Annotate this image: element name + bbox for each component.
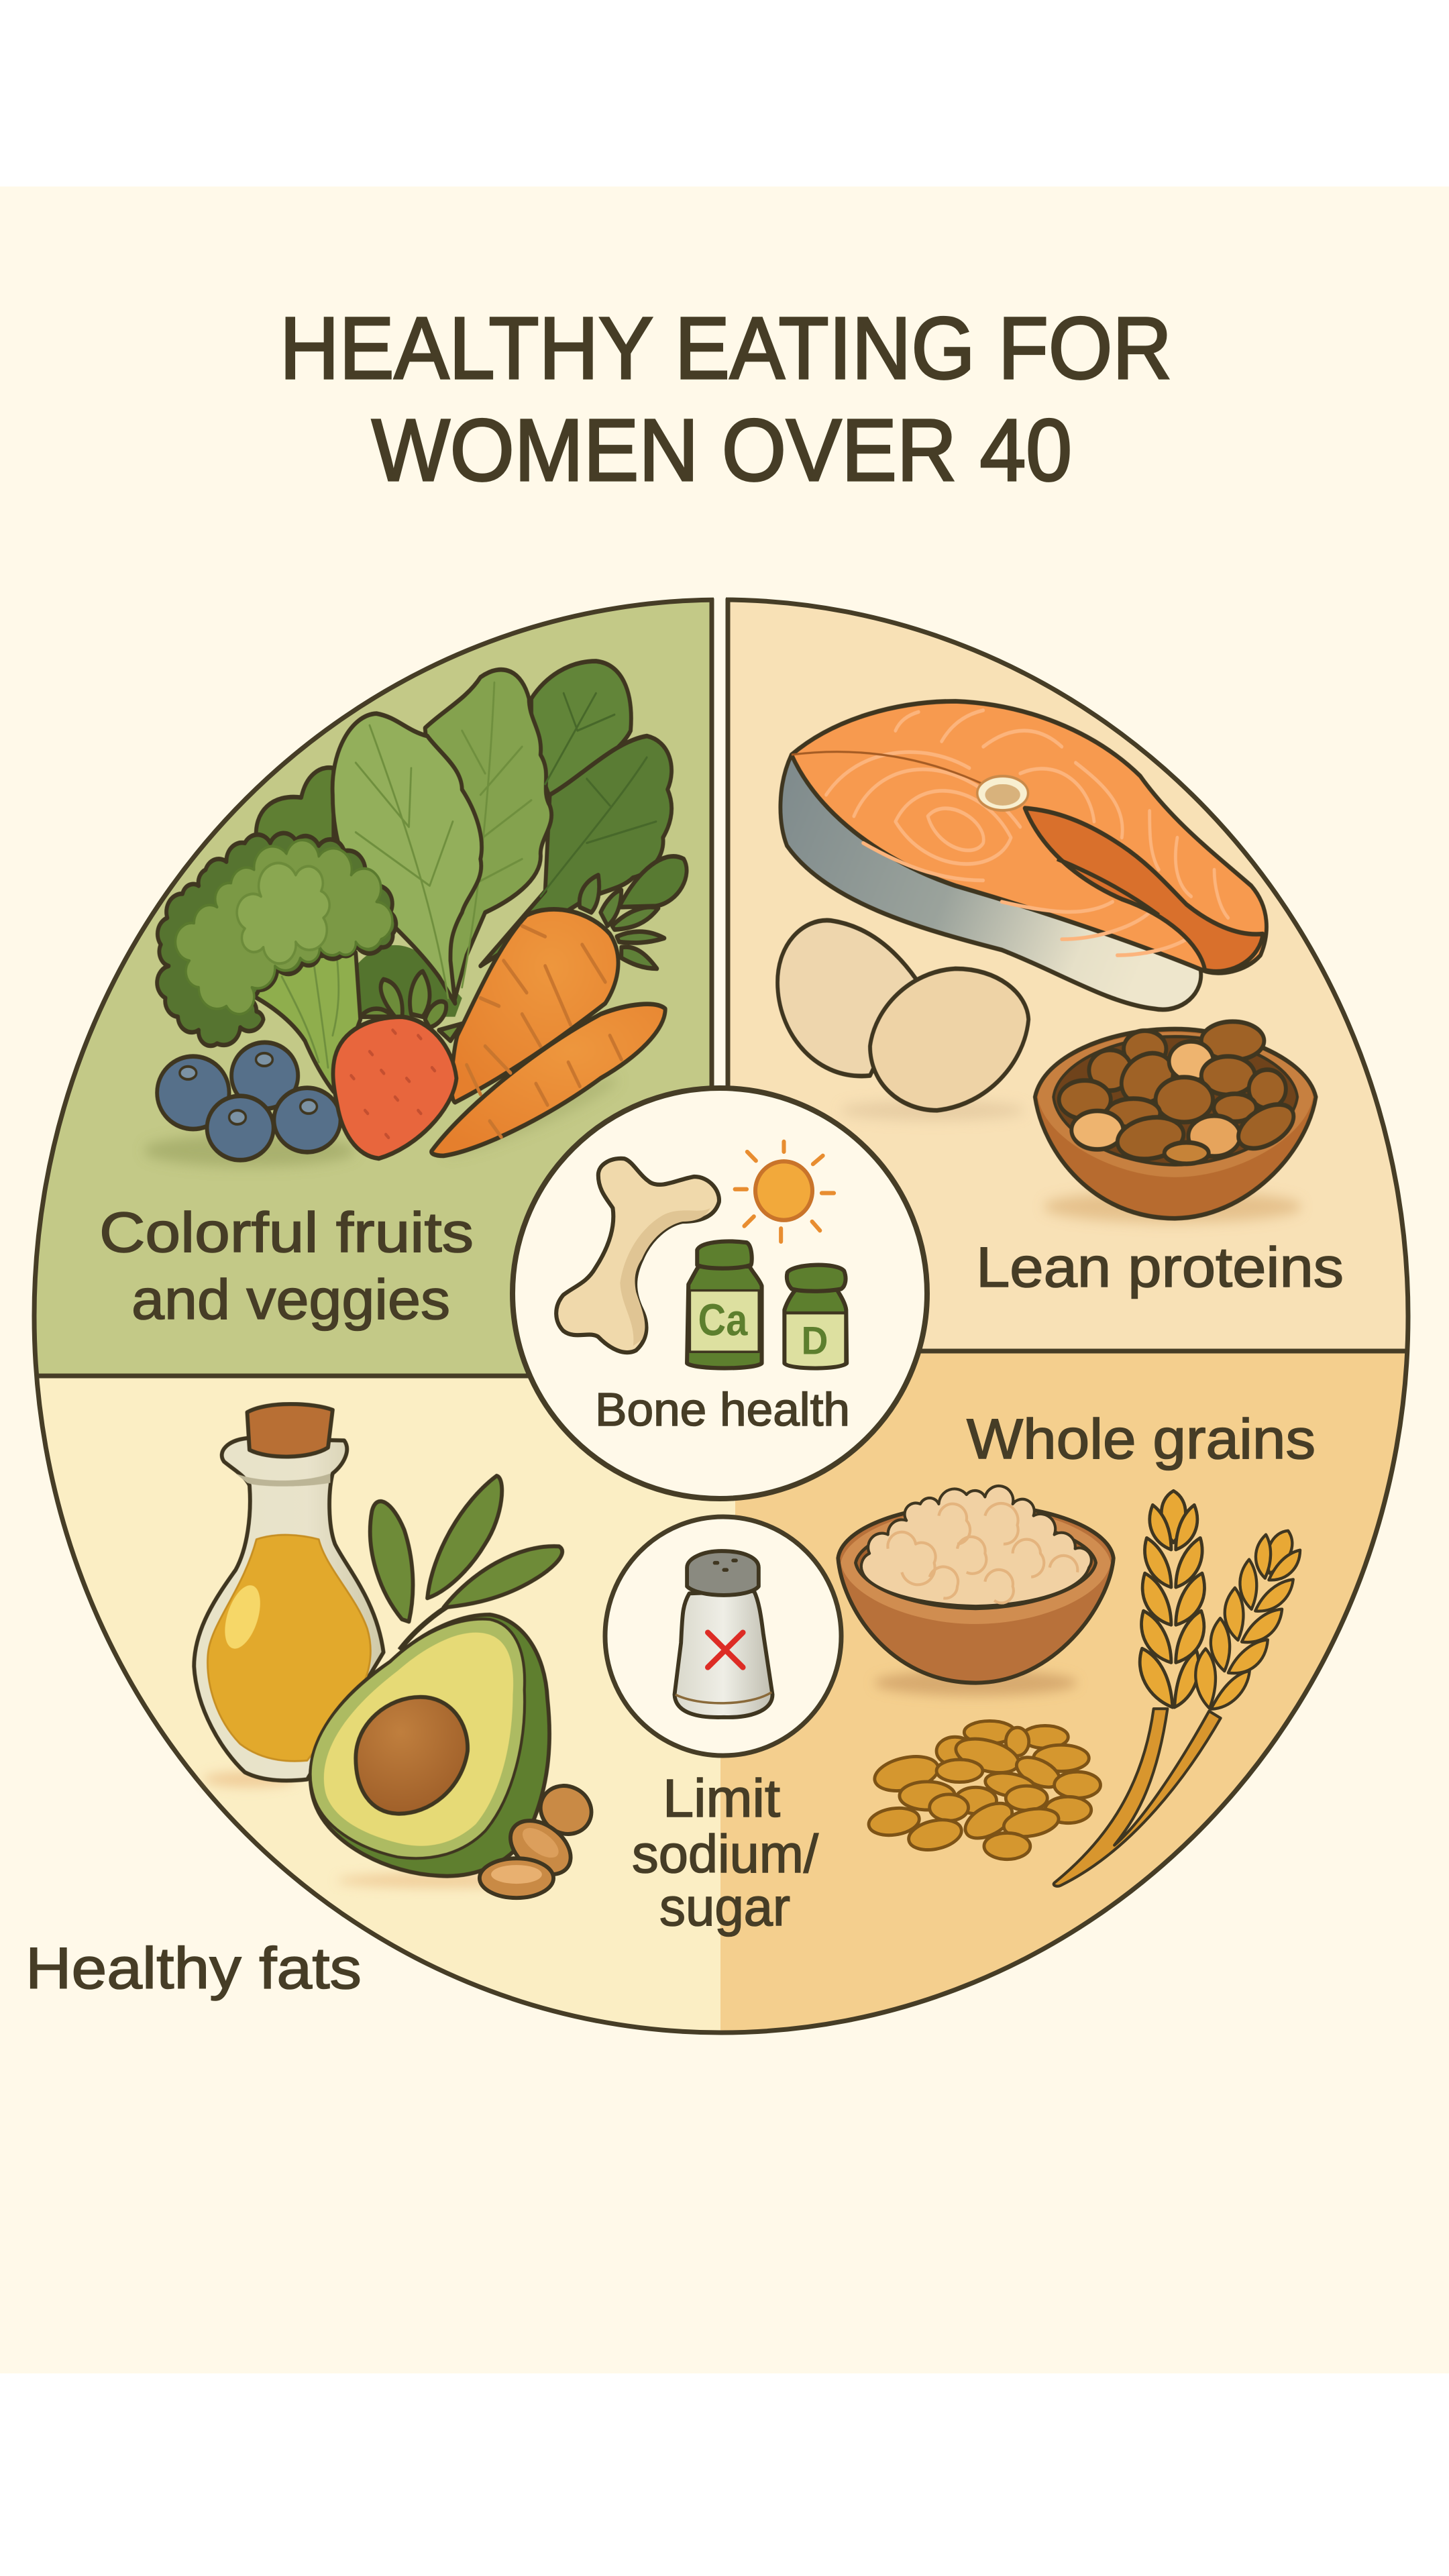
front leaf [333,714,482,1004]
label: limit sodium/sugar: sugar [659,1877,790,1937]
veins on front leaf [356,725,453,998]
icon: vitamin D jar [784,1265,847,1368]
illustration: healthy fats [194,1404,599,1898]
illustration: lean proteins [777,701,1316,1223]
label: lean proteins: Lean proteins [976,1236,1344,1299]
salmon spine [977,776,1028,810]
salmon slit [1057,859,1159,915]
shadow under produce [143,1067,622,1167]
label: limit sodium/sugar [632,1768,819,1937]
egg left [777,920,916,1076]
soft shadows [840,1101,1302,1223]
bowl shadow [874,1670,1077,1696]
salmon grain lines [826,710,1228,955]
label: colorful fruits and veggies: and veggies [131,1268,450,1331]
pile of grains [867,1721,1100,1860]
icon: calcium jar: Ca [698,1295,748,1345]
plate circle with four food sections [27,590,1419,2042]
leaves [370,1476,562,1650]
salmon skin [780,755,1201,1010]
strawberry seeds [351,1030,435,1138]
spine line [792,752,983,784]
illustration: whole grains [838,1486,1313,1886]
icon: bone [556,1159,719,1352]
back leaves [256,661,687,1017]
wheat stalks [1054,1491,1313,1886]
second carrot [431,1004,665,1156]
oil bottle [194,1404,384,1780]
bowl of nuts [1035,1022,1316,1218]
icon: sun [735,1142,834,1242]
title: WOMEN OVER 40 [372,400,1072,499]
shadows [203,1772,541,1887]
illustration: fruits and vegetables [143,661,687,1167]
carrot greens [580,875,664,969]
label: colorful fruits and veggies [99,1201,474,1331]
salmon belly flap [1025,808,1263,971]
circle: limit sodium and sugar [605,1517,841,1756]
carrot markings [467,926,621,1137]
salmon flesh [792,701,1267,973]
icon: vitamin D jar: D [802,1320,828,1363]
large carrot [451,909,619,1102]
avocado [311,1615,549,1876]
label: limit sodium/sugar: sodium/ [632,1824,819,1884]
title [280,299,1172,499]
egg right [870,969,1028,1110]
icon: salt shaker with red cross [675,1551,773,1717]
veins on back leaves [541,693,656,896]
blueberries [157,1042,341,1160]
strawberry [333,1017,456,1159]
circle: bone health [513,1088,927,1499]
label: healthy fats: Healthy fats [25,1936,362,2001]
icon: calcium jar [687,1242,762,1368]
icons: bone, sun, supplements [556,1142,847,1368]
stem detail [282,961,339,1067]
label: colorful fruits and veggies: Colorful fruits [99,1201,474,1264]
label: bone health: Bone health [595,1383,850,1436]
oats bowl [838,1486,1114,1683]
label: whole grains: Whole grains [967,1407,1316,1470]
strawberry leaves [360,971,462,1041]
almonds [480,1778,599,1898]
broccoli crown [157,833,396,1046]
label: limit sodium/sugar: Limit [663,1768,780,1828]
title: HEALTHY EATING FOR [280,299,1172,397]
broccoli stem [247,953,360,1091]
